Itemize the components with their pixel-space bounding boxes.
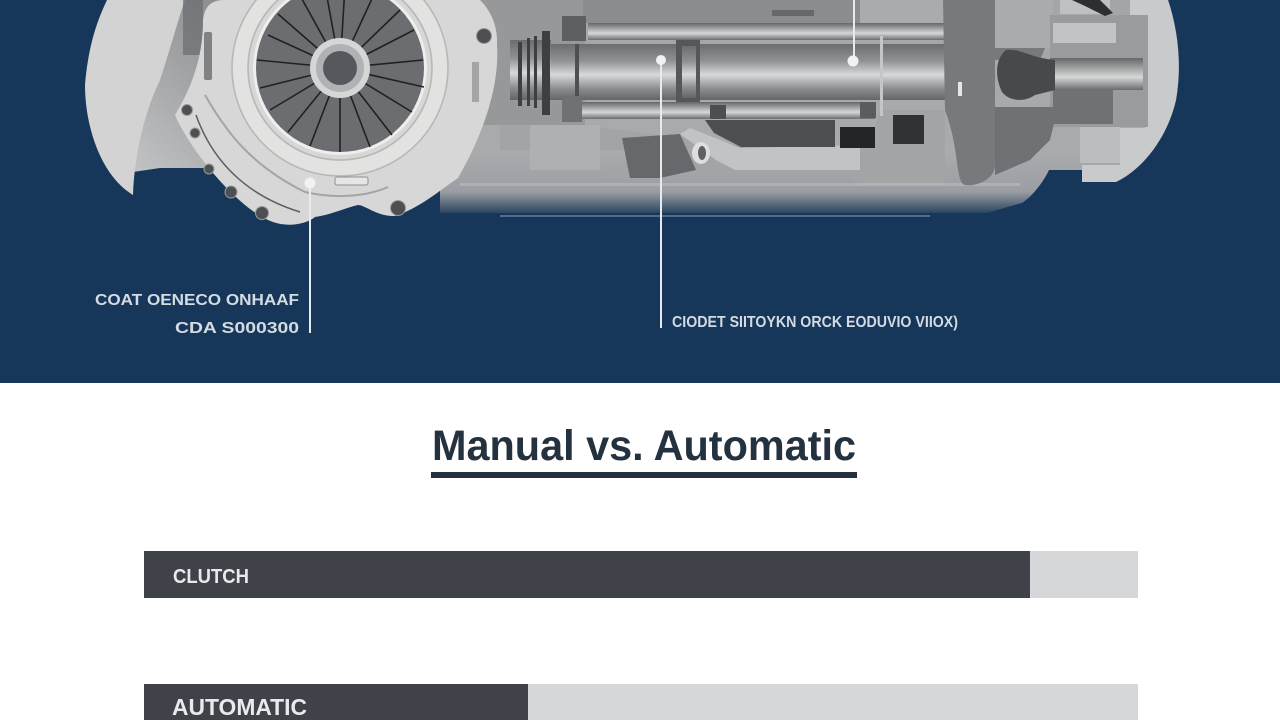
bar: automatic — [144, 684, 1138, 720]
gear shafts — [510, 0, 945, 122]
callout lines and dots — [304, 0, 858, 333]
transmission body — [440, 0, 1179, 213]
callout label: gearbox: CIODET SIITOYKN ORCK EODUVIO VIIOX) — [672, 314, 958, 331]
clutch assembly — [175, 0, 497, 225]
bar: automatic: AUTOMATIC — [172, 694, 307, 720]
callout label: clutch: COAT OENECO ONHAAF — [95, 292, 299, 309]
clutch bolts — [182, 28, 492, 220]
callout label: clutch: CDA S000300 — [175, 320, 299, 337]
output flange and shaft — [943, 0, 1143, 185]
panel: transmission cutaway illustration — [0, 0, 1280, 383]
bar: clutch — [144, 551, 1138, 598]
clutch disc — [256, 0, 424, 152]
faint floor line — [500, 215, 930, 217]
bar: clutch: CLUTCH — [173, 566, 249, 588]
housing left fin — [85, 0, 320, 195]
